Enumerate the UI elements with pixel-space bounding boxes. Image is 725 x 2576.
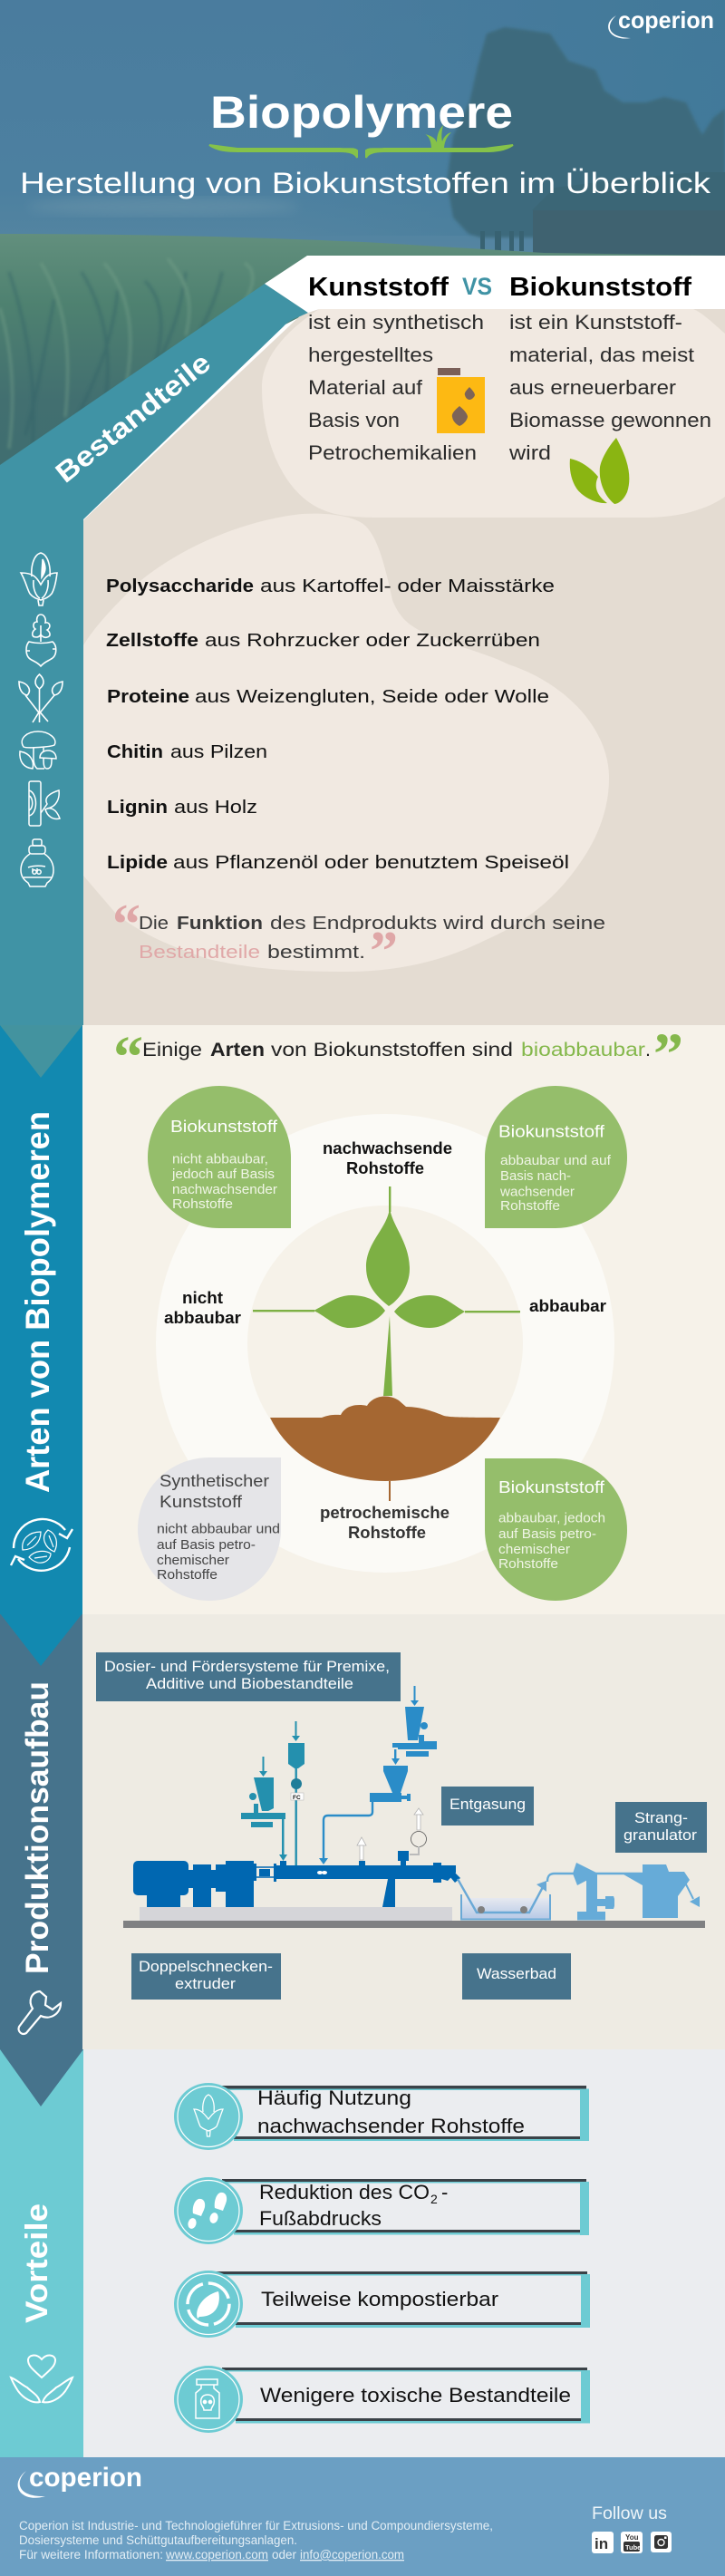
heading: Biokunststoff: Biokunststoff <box>509 273 691 302</box>
benefit: nachwachsende Rohstoffe: nachwachsender Rohstoffe <box>257 2115 525 2137</box>
diagram: outer ring <box>156 1114 614 1573</box>
bubble: Biokunststoff bottom right: chemischer <box>498 1542 570 1557</box>
label: nicht abbaubar: nicht <box>182 1289 223 1307</box>
label: nachwachsende Rohstoffe: Rohstoffe <box>346 1159 424 1177</box>
label: Dosier- und Fördersysteme: Additive und Biobestandteile <box>146 1676 353 1692</box>
feeder left <box>241 1757 287 1861</box>
item: Proteine: aus Weizengluten, Seide oder Wolle <box>195 687 549 707</box>
column: Arten von Biopolymeren: Arten von Biopolymeren <box>19 1111 56 1493</box>
ribbon label: Bestandteile <box>50 346 217 489</box>
heading: Kunststoff: Kunststoff <box>308 273 449 302</box>
subtitle: Herstellung von Biokunststoffen im Überblick <box>20 167 711 199</box>
diagram: plant <box>253 1186 520 1396</box>
bubble: Biokunststoff top left: Rohstoffe <box>172 1196 233 1212</box>
section background: Produktionsaufbau <box>82 1614 725 2049</box>
bubble: Synthetischer Kunststoff: Synthetischer <box>160 1471 269 1490</box>
text: Biokunststoff definition: wird <box>508 441 551 464</box>
label: Entgasung <box>441 1787 534 1825</box>
benefit: CO2-Fußabdruck: Reduktion des CO <box>259 2181 430 2203</box>
benefit: nachwachsende Rohstoffe: Häufig Nutzung <box>257 2087 411 2109</box>
floor and plinth <box>123 1907 705 1928</box>
item: Polysaccharide <box>106 576 555 596</box>
white comparison header band <box>265 256 725 313</box>
bubble: Biokunststoff top right: wachsender <box>499 1184 575 1200</box>
diagram: extruder line <box>123 1686 705 1928</box>
icon: sugar beet <box>26 615 56 666</box>
footer text: www.coperion.com <box>165 2548 268 2561</box>
quote: Funktion: “ <box>112 894 140 955</box>
label: nachwachsende Rohstoffe: nachwachsende <box>323 1139 452 1157</box>
extruder body <box>133 1851 460 1907</box>
footer text: oder <box>272 2548 296 2561</box>
label: Doppelschneckenextruder <box>131 1953 281 2000</box>
bubble: Synthetischer Kunststoff: auf Basis petro- <box>157 1537 256 1553</box>
column: Produktionsaufbau <box>0 1613 82 2049</box>
item: Polysaccharide: Polysaccharide <box>106 576 254 596</box>
benefit: nachwachsende Rohstoffe <box>174 2083 589 2150</box>
text: Kunststoff definition: ist ein synthetisch <box>308 311 484 334</box>
column: Vorteile <box>0 2049 83 2457</box>
label: petrochemische Rohstoffe <box>320 1504 450 1542</box>
text: Kunststoff definition: Material auf <box>308 376 423 399</box>
strand granulator <box>547 1863 700 1920</box>
column: Vorteile: Vorteile <box>20 2203 54 2323</box>
icon: LinkedIn <box>592 2532 614 2553</box>
vents <box>357 1808 426 1860</box>
footer background <box>0 2457 725 2576</box>
bubble: Biokunststoff top right: Basis nach- <box>500 1168 571 1184</box>
label: petrochemische Rohstoffe: petrochemische <box>320 1504 450 1522</box>
teal ribbon: Bestandteile column <box>0 284 308 1025</box>
label: Doppelschneckenextruder: extruder <box>175 1976 237 1992</box>
bubble: Biokunststoff bottom right: abbaubar, jedoch <box>498 1510 605 1526</box>
footer text: info@coperion.com <box>300 2548 404 2561</box>
item: Chitin: Chitin <box>107 742 163 762</box>
text: Biokunststoff definition: aus erneuerbarer <box>509 376 676 399</box>
follow us: Follow us <box>592 2504 667 2523</box>
item: Lipide: aus Pflanzenöl oder benutztem Speiseöl <box>173 853 569 873</box>
quote: Funktion: bestimmt. <box>267 943 365 963</box>
column: Produktionsaufbau: Produktionsaufbau <box>20 1681 55 1974</box>
icon: recycling leaves <box>11 1519 72 1571</box>
quote: Funktion <box>112 894 605 983</box>
benefit: toxische Bestandteile <box>174 2366 590 2433</box>
feeder top right <box>392 1686 437 1765</box>
quote: bioabbaubar: “ <box>113 1024 143 1090</box>
item: Lipide: Lipide <box>107 853 168 873</box>
text: Biokunststoff definition <box>508 311 711 464</box>
quote: Funktion: Bestandteile <box>139 943 260 963</box>
quote: bioabbaubar: Arten <box>210 1039 265 1060</box>
item: Zellstoffe: Zellstoffe <box>106 631 198 651</box>
feeder lower right with screw <box>319 1766 411 1864</box>
bubble: Synthetischer Kunststoff: nicht abbaubar und <box>157 1521 280 1537</box>
quote: Funktion: des Endprodukts wird durch seine <box>270 914 605 934</box>
bubble: Synthetischer Kunststoff: Kunststoff <box>160 1492 243 1511</box>
benefit: toxische Bestandteile: Wenigere toxische Bestandteile <box>260 2384 571 2407</box>
background blob lower <box>83 514 609 972</box>
item: Chitin: aus Pilzen <box>170 742 267 762</box>
benefit: CO2-Fußabdruck: Fußabdrucks <box>259 2207 382 2230</box>
bubble: Biokunststoff top right <box>485 1086 627 1228</box>
item: Proteine <box>107 687 549 707</box>
item: Chitin <box>107 742 267 762</box>
benefit: CO2-Fußabdruck <box>174 2177 589 2244</box>
item: Lignin: Lignin <box>107 798 168 818</box>
bubble: Biokunststoff bottom right: auf Basis petro- <box>498 1526 596 1542</box>
bubble: Synthetischer Kunststoff: chemischer <box>157 1553 229 1568</box>
bubble: Biokunststoff top left: jedoch auf Basis <box>171 1167 275 1182</box>
feeder middle with FC <box>288 1721 304 1865</box>
icon: wood with leaves <box>29 781 60 826</box>
label: Stranggranulator <box>615 1802 707 1853</box>
quote: bioabbaubar <box>113 1022 683 1090</box>
footer text: Dosiersysteme und Schüttgutaufbereitungsanlagen. <box>19 2533 297 2547</box>
title: Biopolymere <box>210 87 513 138</box>
section background: Bestandteile <box>83 309 725 1025</box>
column: Arten von Biopolymeren <box>0 1025 82 1614</box>
icon: wrench <box>19 1991 61 2034</box>
icon: mushrooms <box>20 731 56 769</box>
label: Stranggranulator: granulator <box>624 1827 698 1844</box>
item: Zellstoffe: aus Rohrzucker oder Zuckerrüben <box>205 631 540 651</box>
water bath <box>458 1879 550 1920</box>
bubble: Biokunststoff bottom right <box>485 1458 627 1601</box>
bubble: Biokunststoff bottom right: Biokunststoff <box>498 1477 605 1496</box>
icon: oil bottle <box>21 839 53 886</box>
icon: YouTube <box>621 2532 643 2553</box>
bubble: Biokunststoff top right: Biokunststoff <box>498 1122 605 1140</box>
quote: bioabbaubar: ” <box>653 1022 683 1088</box>
benefit: kompostierbar <box>174 2271 590 2338</box>
section background: Arten <box>82 1025 725 1614</box>
icon: LinkedIn: in <box>594 2535 608 2552</box>
text: Kunststoff definition: hergestelltes <box>308 344 433 366</box>
label: Stranggranulator: Strang- <box>634 1810 688 1826</box>
label: Dosier- und Fördersysteme: Dosier- und Fördersysteme für Premixe, <box>104 1659 390 1675</box>
label: petrochemische Rohstoffe: Rohstoffe <box>348 1524 426 1542</box>
benefit: CO2-Fußabdruck: 2 <box>430 2192 438 2206</box>
footer text <box>19 2519 493 2561</box>
icon: YouTube: Tube <box>625 2543 641 2552</box>
logo: coperion footer: coperion <box>29 2463 142 2493</box>
bubble: Synthetischer Kunststoff <box>138 1457 281 1601</box>
bubble: Synthetischer Kunststoff: Rohstoffe <box>157 1567 218 1583</box>
item: Lignin: aus Holz <box>174 798 257 818</box>
background blob upper <box>262 309 725 518</box>
diagram: soil <box>270 1397 500 1501</box>
text: Kunststoff definition: Basis von <box>308 409 400 431</box>
text: Biokunststoff definition: ist ein Kunststoff- <box>509 311 682 334</box>
bubble: Biokunststoff top left: Biokunststoff <box>170 1117 278 1136</box>
text: Kunststoff definition: Petrochemikalien <box>308 441 477 464</box>
label: nachwachsende Rohstoffe <box>323 1139 452 1177</box>
bubble: Biokunststoff top left: nicht abbaubar, <box>172 1151 268 1167</box>
label: Wasserbad <box>462 1953 571 2000</box>
footer text: Coperion ist Industrie- und Technologieführer für Extrusions- und Compoundiersysteme, <box>19 2519 493 2532</box>
item: Lignin <box>107 798 257 818</box>
logo: coperion top: coperion <box>618 6 714 34</box>
text: Biokunststoff definition: material, das meist <box>509 344 694 366</box>
quote: Funktion: Die <box>139 914 169 934</box>
icon: corn <box>21 553 57 605</box>
diagram: inner circle <box>247 1206 523 1481</box>
title underline bracket with grass <box>209 125 513 158</box>
quote: bioabbaubar: bioabbaubar <box>521 1039 645 1060</box>
icon: Instagram <box>651 2532 672 2552</box>
icon: green leaves <box>570 438 629 504</box>
label: abbaubar: abbaubar <box>529 1297 606 1315</box>
label: Dosier- und Fördersysteme <box>96 1652 401 1701</box>
section background: Vorteile <box>82 2049 725 2457</box>
item: Polysaccharide: aus Kartoffel- oder Maisstärke <box>260 576 555 596</box>
icon: YouTube: You <box>625 2533 639 2542</box>
label: Wasserbad: Wasserbad <box>477 1966 556 1982</box>
item: Zellstoffe <box>106 631 540 651</box>
list: Bestandteile items <box>106 576 569 873</box>
text: Kunststoff definition <box>308 311 484 464</box>
icon: heart in hands <box>11 2356 72 2402</box>
footer text: Für weitere Informationen: <box>19 2548 163 2561</box>
label: Entgasung: Entgasung <box>450 1796 526 1813</box>
icon: petrochemical canister <box>437 368 485 433</box>
label: nicht abbaubar <box>164 1289 241 1327</box>
item: Proteine: Proteine <box>107 687 189 707</box>
label: Doppelschneckenextruder: Doppelschnecken- <box>139 1959 273 1975</box>
quote: bioabbaubar: Einige <box>142 1039 202 1060</box>
benefit: kompostierbar: Teilweise kompostierbar <box>261 2288 498 2310</box>
quote: bioabbaubar: von Biokunststoffen sind <box>271 1039 513 1060</box>
bubble: Biokunststoff top right: abbaubar und auf <box>500 1153 612 1168</box>
label: nicht abbaubar: abbaubar <box>164 1309 241 1327</box>
bubble: Biokunststoff top left: nachwachsender <box>172 1182 277 1197</box>
VS: VS <box>462 273 492 300</box>
header photo background <box>0 0 725 471</box>
bubble: Biokunststoff top left <box>148 1086 291 1228</box>
quote: Funktion: ” <box>370 921 398 983</box>
text: Biokunststoff definition: Biomasse gewonnen <box>509 409 711 431</box>
benefit: CO2-Fußabdruck: - <box>441 2181 448 2203</box>
bubble: Biokunststoff bottom right: Rohstoffe <box>498 1556 558 1572</box>
quote: Funktion: Funktion <box>177 914 263 934</box>
quote: bioabbaubar: . <box>645 1039 651 1060</box>
feeder middle with FC: FC <box>293 1795 301 1801</box>
bubble: Biokunststoff top right: Rohstoffe <box>500 1198 560 1214</box>
icon: plant sprigs <box>19 674 63 722</box>
